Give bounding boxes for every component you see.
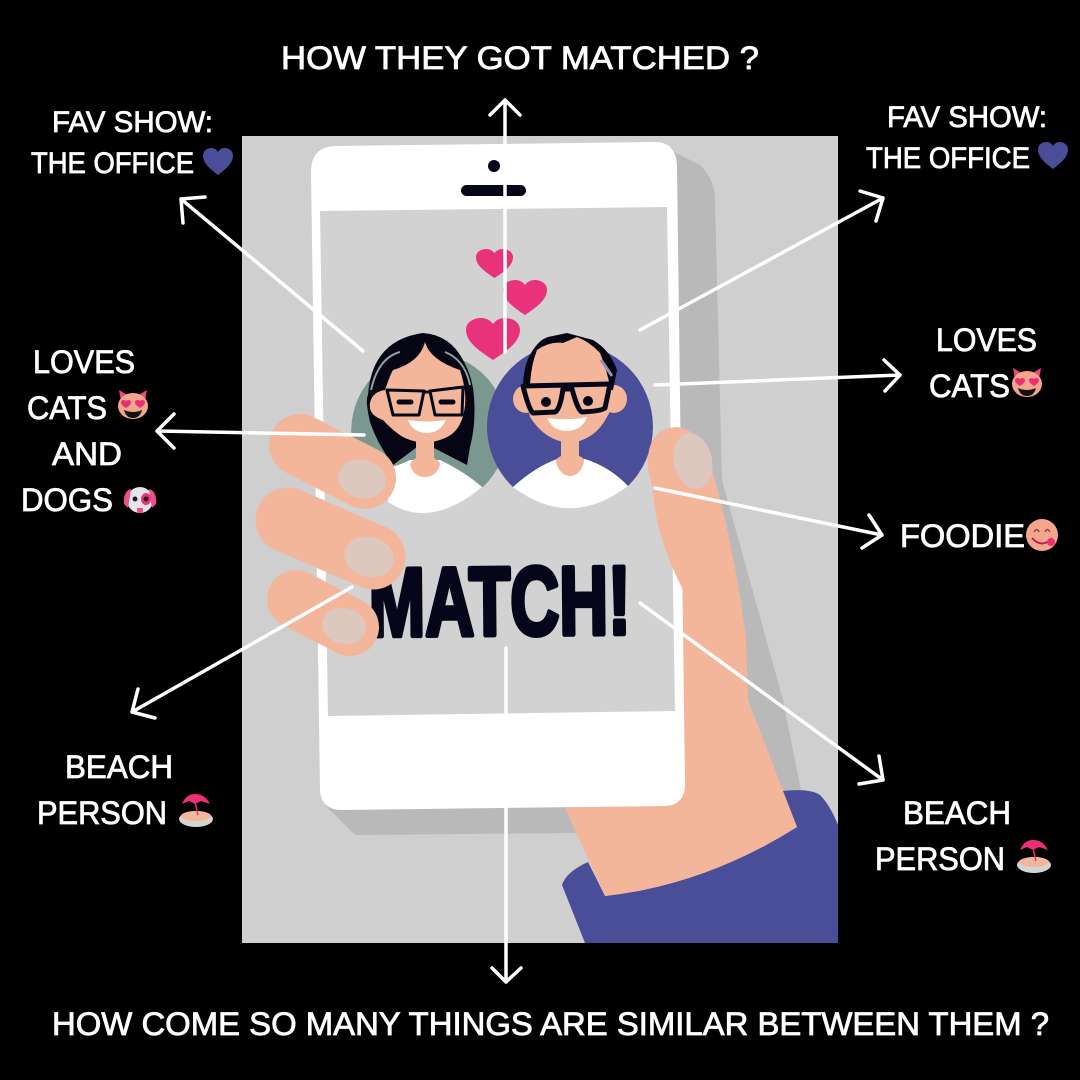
arrow: foodie [655,488,882,548]
arrow: right beach person [640,603,883,784]
arrow: left loves cats and dogs [157,414,364,448]
closed eyes [399,400,453,404]
hand palm [565,470,797,896]
match text: MATCH! [368,546,631,657]
arrow down: similar things [492,648,521,982]
label: left fav show: THE OFFICE [31,147,194,180]
phone shadow [325,150,802,835]
label: left loves cats and dogs [21,344,156,518]
hearts [466,249,547,360]
label: left beach person: BEACH [65,749,173,785]
icon: heart-eyes cat [118,390,148,419]
arrow: right fav show [640,191,883,330]
label: foodie: FOODIE [900,518,1025,554]
smile [408,420,446,433]
shirt [513,459,628,508]
icon: blue heart [203,148,233,175]
title: HOW THEY GOT MATCHED ? [281,40,759,76]
finger two [288,520,373,557]
ears [513,385,539,413]
teal circle [351,352,507,496]
illustration backdrop [242,136,838,943]
icon: beach island [1017,840,1051,873]
neck [556,438,584,476]
hair [523,333,617,390]
thumb [648,427,735,600]
blue circle [487,344,653,487]
heart bottom [466,318,520,360]
hair highlights [371,352,470,390]
label: left loves cats and dogs: CATS [27,390,107,426]
label: left loves cats and dogs: LOVES [33,344,135,380]
sleeve [562,790,838,943]
nail one [334,454,390,504]
icon: heart-eyes cat [1012,368,1042,397]
arrow up: how they got matched [490,100,520,352]
label: right fav show [866,101,1068,175]
arrow: left fav show [181,197,363,351]
icon: beach island [179,794,213,827]
heart top [476,249,513,278]
finger three [296,599,350,627]
label: left beach person: PERSON [37,795,167,831]
eyes [541,397,551,407]
fingernails [318,430,717,649]
avatar: woman [351,333,507,513]
phone camera dot [488,160,500,172]
label: left beach person [37,749,213,831]
icon: blue heart [1038,142,1068,169]
avatar: man [487,333,653,508]
neck [410,440,440,477]
label: left fav show: FAV SHOW: [52,106,213,139]
smile [547,417,587,431]
label: right beach person: BEACH [903,795,1011,831]
phone body [311,142,685,810]
hair highlight [601,360,612,376]
heart middle [503,280,547,315]
label: left loves cats and dogs: AND [52,436,122,472]
finger one [300,445,365,478]
label: right loves cats: LOVES [936,322,1037,358]
head [528,337,613,443]
icon: dog [124,487,156,513]
label: right fav show: THE OFFICE [866,142,1030,175]
label: left loves cats and dogs: DOGS [21,482,113,518]
icon: yum face [1026,519,1058,551]
nail two [340,531,398,583]
glasses [387,387,463,415]
bottom heading: HOW COME SO MANY THINGS ARE SIMILAR BETWEEN THEM ? [52,1006,1049,1042]
arrow: right loves cats [655,360,900,391]
nail three [318,603,370,649]
hair [367,333,474,465]
thumb nail [669,430,717,492]
phone screen [320,207,675,716]
label: left fav show [31,106,233,180]
face and ear [370,342,465,442]
glasses [523,384,610,413]
fingers [288,445,373,627]
arrows [132,100,900,982]
illustration panel: hand holding phone [242,136,838,943]
shirt [388,460,482,513]
label: right loves cats [929,322,1042,404]
label: right fav show: FAV SHOW: [887,101,1047,134]
label: right loves cats: CATS [929,368,1010,404]
label: right beach person: PERSON [875,841,1005,877]
phone speaker [461,185,526,196]
label: right beach person [875,795,1051,877]
arrow: left beach person [132,587,352,718]
